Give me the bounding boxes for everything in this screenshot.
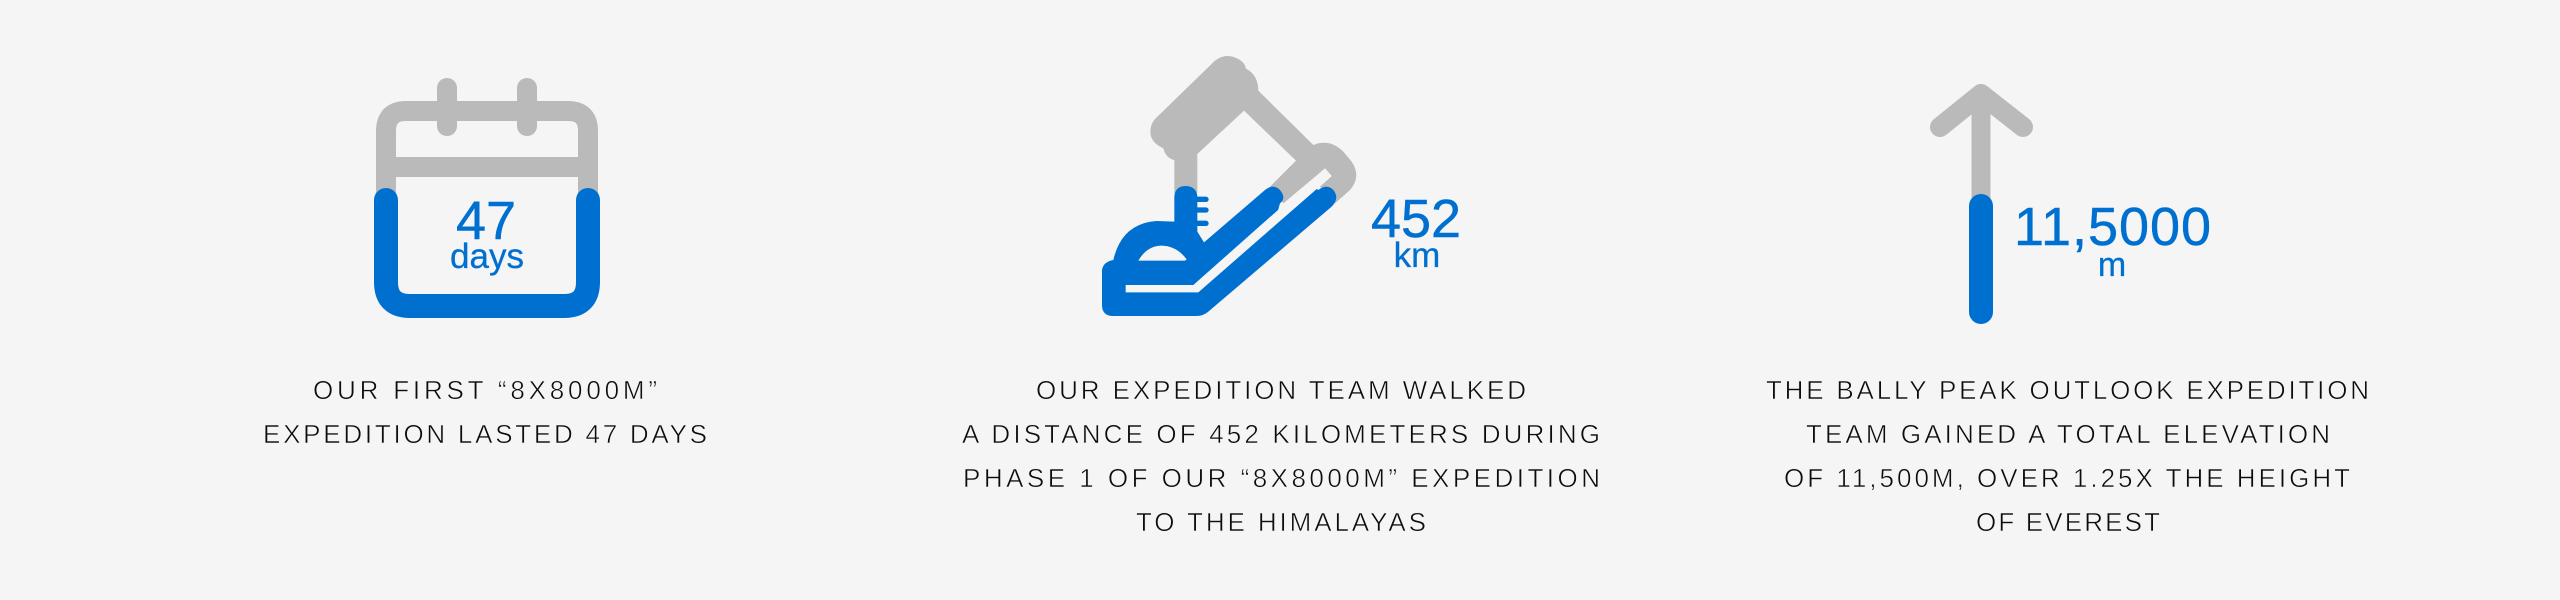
caption: distance walked bbox=[962, 375, 1600, 537]
caption: distance walked: A DISTANCE OF 452 KILOMETERS DURING bbox=[962, 419, 1600, 449]
caption: distance walked: OUR EXPEDITION TEAM WALKED bbox=[1036, 375, 1526, 405]
panel: 452 km bbox=[962, 56, 1600, 537]
caption: elevation gained: OF 11,500M, OVER 1.25X THE HEIGHT bbox=[1784, 463, 2350, 493]
caption: first expedition: EXPEDITION LASTED 47 DAYS bbox=[263, 419, 707, 449]
caption: elevation gained: THE BALLY PEAK OUTLOOK EXPEDITION bbox=[1766, 375, 2369, 405]
unit: km: km bbox=[1394, 236, 1440, 275]
caption: distance walked: TO THE HIMALAYAS bbox=[1136, 507, 1426, 537]
caption: first expedition bbox=[263, 375, 707, 449]
unit: m: m bbox=[2098, 246, 2126, 284]
icon: up arrow bbox=[1940, 94, 2023, 312]
stat: 452: 452 bbox=[1371, 189, 1461, 249]
caption: elevation gained: OF EVEREST bbox=[1976, 507, 2160, 537]
caption: elevation gained bbox=[1766, 375, 2369, 537]
icon: boot bbox=[1102, 56, 1356, 316]
panel: 47 days bbox=[263, 88, 707, 449]
unit: days: days bbox=[450, 237, 524, 276]
panel: 11,5000 m bbox=[1766, 94, 2369, 537]
stat: 47: 47 bbox=[456, 191, 516, 251]
stat: 11,5000: 11,5000 bbox=[2014, 197, 2211, 257]
caption: elevation gained: TEAM GAINED A TOTAL ELEVATION bbox=[1806, 419, 2330, 449]
icon: calendar bbox=[386, 88, 588, 306]
caption: distance walked: PHASE 1 OF OUR “8X8000M” EXPEDITION bbox=[963, 463, 1600, 493]
caption: first expedition: OUR FIRST “8X8000M” bbox=[313, 375, 657, 405]
